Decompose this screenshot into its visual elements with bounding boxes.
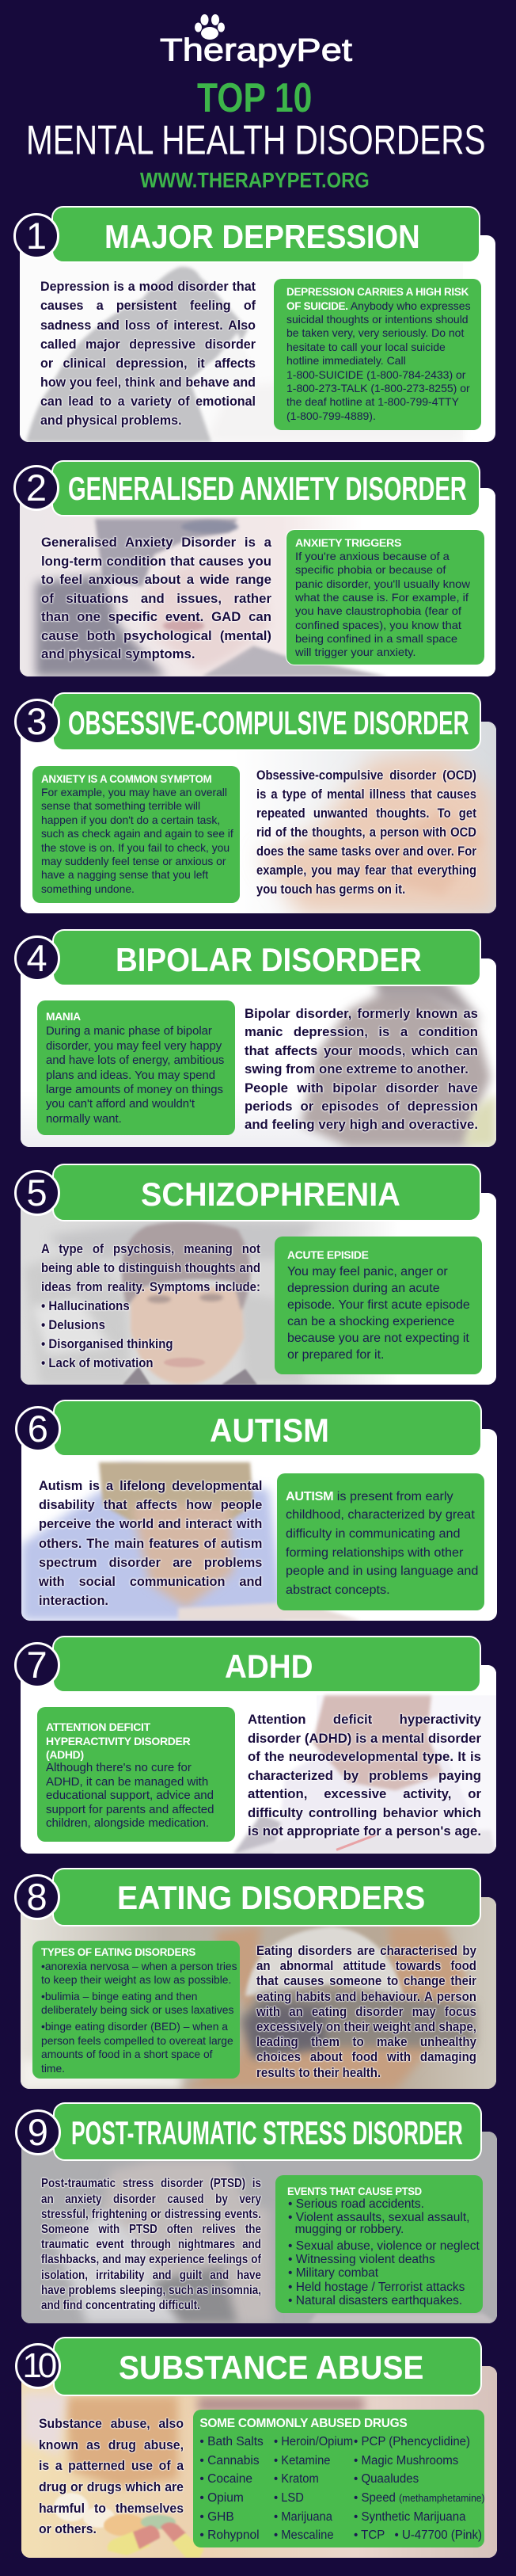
text block: definition: called major depressive disorder bbox=[40, 337, 256, 352]
section 3: obsessive-compulsive disorder bbox=[14, 692, 496, 913]
text block: definition: Depression is a mood disorder that bbox=[40, 279, 256, 294]
text block: definition: of the neurodevelopmental type. It is bbox=[248, 1749, 481, 1764]
number badge 8: 8 bbox=[27, 1876, 47, 1918]
callout text: For example, you may have an overall bbox=[41, 786, 227, 798]
callout text: be taken very, very seriously. Do not bbox=[286, 326, 464, 339]
drug list column 1: • Cocaine bbox=[199, 2472, 252, 2486]
number badge 4 bbox=[14, 936, 60, 981]
callout text: because you are not expecting it bbox=[287, 1332, 469, 1345]
text block: definition: Autism is a lifelong developmental bbox=[39, 1478, 262, 1493]
callout text: amounts of food in a short space of bbox=[41, 2048, 212, 2060]
callout text: hotline immediately. Call bbox=[286, 354, 406, 367]
text block: definition: sadness and loss of interest. Also bbox=[40, 318, 256, 333]
callout text: time. bbox=[41, 2062, 65, 2075]
text block: definition: with social communication and bbox=[39, 1574, 262, 1589]
callout text: ANXIETY TRIGGERS bbox=[295, 537, 401, 548]
callout: commonly abused drugs bbox=[193, 2410, 484, 2547]
number badge 6: 6 bbox=[28, 1408, 48, 1450]
number badge 2 bbox=[13, 465, 59, 511]
text block: definition: does the same tasks over and over. For bbox=[256, 844, 476, 859]
text block: definition: Substance abuse, also bbox=[39, 2416, 184, 2431]
callout text: During a manic phase of bipolar bbox=[46, 1025, 212, 1038]
drug list column 2: • LSD bbox=[274, 2491, 304, 2505]
text block: definition: results to their health. bbox=[256, 2064, 381, 2080]
text block: definition: and physical problems. bbox=[40, 413, 182, 428]
number badge 3: 3 bbox=[27, 700, 47, 742]
callout list: mugging or robbery. bbox=[295, 2223, 404, 2236]
callout text: Although there's no cure for bbox=[46, 1762, 192, 1774]
text block: definition bbox=[39, 2414, 184, 2540]
callout text: abstract concepts. bbox=[285, 1583, 389, 1597]
callout text: TYPES OF EATING DISORDERS bbox=[41, 1946, 195, 1958]
text block: definition: periods or episodes of depression bbox=[244, 1099, 477, 1114]
callout text: the stove is on. If you fail to check, you bbox=[41, 841, 230, 854]
logo: TherapyPet bbox=[160, 14, 353, 68]
section 10: substance abuse bbox=[0, 2337, 500, 2558]
header bar bbox=[52, 1400, 482, 1457]
callout text: being confined in a small space bbox=[295, 632, 457, 645]
panel: photo background bbox=[20, 235, 495, 442]
text block: definition: an anxiety disorder caused by very bbox=[41, 2193, 261, 2206]
drug list column 3: • Magic Mushrooms bbox=[354, 2454, 459, 2467]
text block: definition bbox=[38, 1478, 263, 1608]
text block: definition: of situations and issues, rather bbox=[41, 591, 271, 606]
text block: definition bbox=[244, 1006, 479, 1133]
text block: definition: attention, excessive activity, or bbox=[248, 1786, 481, 1801]
callout list: • Natural disasters earthquakes. bbox=[288, 2294, 462, 2307]
callout text: educational support, advice and bbox=[46, 1789, 214, 1802]
callout text: happen if you don't do a certain task, bbox=[41, 814, 220, 826]
callout: mania bbox=[37, 1000, 235, 1135]
text block: definition: perceive the world and interact with bbox=[39, 1516, 262, 1531]
callout: adhd management bbox=[37, 1707, 235, 1842]
text block: definition: interaction. bbox=[39, 1593, 108, 1608]
callout list: • Held hostage / Terrorist attacks bbox=[288, 2281, 465, 2294]
text block: definition: Eating disorders are characterised by bbox=[256, 1943, 476, 1958]
callout text bbox=[295, 537, 470, 658]
text block: definition: disability that affects how people bbox=[39, 1497, 262, 1512]
text block: definition and symptoms: • Disorganised thinking bbox=[41, 1336, 173, 1351]
callout text: MANIA bbox=[46, 1011, 81, 1023]
panel: photo background bbox=[21, 722, 496, 913]
drug list column 2: • Kratom bbox=[274, 2472, 319, 2486]
callout: events that cause ptsd bbox=[275, 2175, 483, 2313]
number badge 2: 2 bbox=[26, 467, 47, 509]
text block: definition and symptoms: • Delusions bbox=[41, 1317, 104, 1332]
text block: definition: and find concentrating difficult. bbox=[41, 2299, 200, 2312]
callout text: person feels compelled to overeat large bbox=[41, 2034, 233, 2047]
header bar bbox=[52, 929, 481, 986]
callout text: 1-800-273-TALK (1-800-273-8255) or bbox=[286, 382, 470, 394]
drug list column 2: • Ketamine bbox=[274, 2454, 330, 2467]
text block: definition: and feeling very high and overactive. bbox=[244, 1117, 477, 1132]
callout list: • Serious road accidents. bbox=[288, 2197, 424, 2211]
header bar bbox=[52, 1868, 481, 1926]
callout text: and have lots of energy, ambitious bbox=[46, 1054, 224, 1067]
section 6: autism bbox=[15, 1400, 497, 1621]
callout text: ANXIETY IS A COMMON SYMPTOM bbox=[41, 773, 211, 785]
callout text: have a nagging sense that you left bbox=[41, 868, 208, 881]
section 7: adhd bbox=[14, 1636, 496, 1854]
text block: definition: or others. bbox=[39, 2521, 97, 2536]
text block: definition: eating habits and behaviour. A person bbox=[256, 1989, 476, 2004]
header bar bbox=[52, 2102, 482, 2161]
section 5: schizophrenia bbox=[14, 1164, 496, 1385]
text block: definition: spectrum disorder are problems bbox=[39, 1555, 262, 1570]
section 8: eating disorders bbox=[14, 1868, 496, 2089]
text block: definition: excessively on their weight and shape, bbox=[256, 2019, 476, 2034]
icon: paw bbox=[195, 14, 225, 40]
callout text: ACUTE EPISIDE bbox=[287, 1249, 368, 1261]
callout text: episode. Your first acute episode bbox=[287, 1298, 469, 1312]
drug list column 1: • Cannabis bbox=[199, 2454, 260, 2467]
text block: definition and symptoms bbox=[40, 1241, 261, 1370]
text block: definition: Bipolar disorder, formerly known as bbox=[244, 1006, 477, 1021]
callout text: If you're anxious because of a bbox=[295, 550, 450, 562]
drug list column 2: • Mescaline bbox=[274, 2528, 334, 2542]
callout text: depression during an acute bbox=[287, 1282, 439, 1295]
callout text: panic disorder, you'll usually know bbox=[295, 577, 470, 590]
callout text: the deaf hotline at 1-800-799-4TTY bbox=[286, 395, 459, 408]
callout text: HYPERACTIVITY DISORDER bbox=[46, 1736, 190, 1747]
text block: definition: others. The main features of autism bbox=[39, 1536, 262, 1551]
text block: definition and symptoms: ideas from reality. Symptoms include: bbox=[41, 1279, 260, 1294]
callout text bbox=[287, 1249, 469, 1362]
callout: anxiety triggers bbox=[286, 530, 484, 665]
callout text: ADHD, it can be managed with bbox=[46, 1776, 208, 1789]
drug list column 1: • Rohypnol bbox=[199, 2528, 260, 2542]
text block: definition: can lead to a variety of emotional bbox=[40, 394, 256, 409]
text block: definition and symptoms: • Lack of motivation bbox=[41, 1355, 153, 1370]
callout: anxiety symptom bbox=[32, 765, 240, 903]
callout text: you have claustrophobia (fear of bbox=[295, 604, 461, 617]
callout text: you can't afford and wouldn't bbox=[46, 1098, 195, 1111]
callout list: • Witnessing violent deaths bbox=[288, 2253, 435, 2266]
text block: definition: Post-traumatic stress disorder (PTSD) is bbox=[41, 2177, 261, 2190]
callout: autism onset bbox=[277, 1473, 484, 1610]
text block: definition and symptoms: • Hallucinations bbox=[41, 1298, 129, 1313]
number badge 6 bbox=[15, 1406, 61, 1452]
section 9: post-traumatic stress disorder bbox=[15, 2102, 497, 2323]
text block: definition: to feel anxious about a wide range bbox=[41, 572, 271, 587]
callout text: something undone. bbox=[41, 882, 134, 895]
text block: definition and symptoms: being able to distinguish thoughts and bbox=[41, 1260, 260, 1275]
text block: definition: characterized by problems paying bbox=[248, 1768, 481, 1783]
number badge 3 bbox=[14, 699, 60, 745]
number badge 9: 9 bbox=[28, 2111, 48, 2153]
callout text: childhood, characterized by great bbox=[285, 1508, 474, 1522]
text block: definition: Someone with PTSD often relives the bbox=[41, 2223, 261, 2236]
drug list column 2 bbox=[274, 2433, 351, 2545]
callout text: large amounts of money on things bbox=[46, 1084, 223, 1096]
callout text: people and in using language and bbox=[285, 1564, 478, 1578]
number badge 5 bbox=[14, 1170, 60, 1216]
text block: definition: causes a persistent feeling of bbox=[40, 298, 256, 313]
drug list column 1: • GHB bbox=[199, 2510, 234, 2524]
text block: definition: drug or drugs which are bbox=[39, 2479, 184, 2494]
drug list column 3 bbox=[354, 2433, 482, 2545]
callout text: ATTENTION DEFICIT bbox=[46, 1721, 150, 1733]
callout heading: EVENTS THAT CAUSE PTSD bbox=[287, 2185, 422, 2197]
callout list: • Sexual abuse, violence or neglect bbox=[288, 2239, 480, 2253]
header bar bbox=[51, 206, 480, 263]
header bar bbox=[52, 2337, 482, 2396]
callout text: or prepared for it. bbox=[287, 1348, 384, 1362]
text block: definition: stressful, frightening or distressing events. bbox=[41, 2208, 261, 2221]
number badge 10: 10 bbox=[22, 2346, 53, 2385]
callout text: disorder, you may feel very happy bbox=[46, 1040, 222, 1053]
callout text: •anorexia nervosa – when a person tries bbox=[41, 1960, 237, 1972]
text block: definition: is a type of mental illness that causes bbox=[256, 787, 476, 802]
text block: definition: Obsessive-compulsive disorder (OCD) bbox=[256, 768, 476, 783]
section 1: major depression bbox=[13, 206, 495, 442]
callout text: sense that something terrible will bbox=[41, 799, 200, 812]
callout text: such as check again and again to see if bbox=[41, 827, 233, 840]
text block: definition: is not appropriate for a person's age. bbox=[248, 1823, 481, 1839]
drug list column 2: • Heroin/Opium bbox=[274, 2435, 353, 2448]
drug list column 3: • Speed (methamphetamine) bbox=[354, 2491, 485, 2505]
callout text: suicidal thoughts or intentions should bbox=[286, 313, 469, 326]
callout text bbox=[46, 1721, 214, 1830]
header bar bbox=[51, 459, 480, 516]
callout heading: SOME COMMONLY ABUSED DRUGS bbox=[199, 2417, 407, 2430]
callout text: to keep their weight as low as possible. bbox=[41, 1973, 231, 1986]
callout list: • Violent assaults, sexual assault, bbox=[288, 2211, 469, 2224]
callout text: support for parents and affected bbox=[46, 1804, 214, 1816]
number badge 5: 5 bbox=[27, 1172, 47, 1214]
callout text bbox=[286, 286, 471, 422]
callout text: forming relationships with other bbox=[285, 1546, 463, 1560]
callout text: can be a shocking experience bbox=[287, 1315, 454, 1328]
drug list column 2: • Marijuana bbox=[274, 2510, 332, 2524]
header bar bbox=[52, 1636, 481, 1693]
text block: definition: long-term condition that causes you bbox=[41, 554, 271, 569]
text block: definition: difficulty controlling behavior which bbox=[248, 1805, 481, 1820]
drug list column 3: • PCP (Phencyclidine) bbox=[354, 2435, 470, 2448]
text block: definition: isolation, irritability and guilt and have bbox=[41, 2269, 261, 2282]
text block: definition: swing from one extreme to another. bbox=[244, 1061, 468, 1077]
callout text: plans and ideas. You may spend bbox=[46, 1069, 215, 1082]
text block: definition: and physical symptoms. bbox=[41, 646, 195, 661]
text block: definition bbox=[40, 279, 256, 429]
panel: photo background bbox=[21, 2132, 497, 2323]
text block: definition: harmful to themselves bbox=[39, 2501, 184, 2516]
text block: definition: is a patterned use of a bbox=[39, 2458, 184, 2473]
header bar bbox=[52, 1164, 481, 1221]
text block: definition: disorder (ADHD) is a mental disorder bbox=[248, 1731, 481, 1746]
callout text: AUTISM is present from early bbox=[285, 1490, 453, 1503]
text block: definition bbox=[40, 2177, 263, 2313]
text block: definition: flashbacks, and may experience feelings of bbox=[41, 2253, 261, 2266]
text block: definition: Generalised Anxiety Disorder is a bbox=[41, 535, 271, 550]
section 4: bipolar disorder bbox=[14, 929, 496, 1147]
text block: definition: known as drug abuse, bbox=[39, 2437, 184, 2452]
text block: definition: with an eating disorder may focus bbox=[256, 2004, 476, 2019]
callout text: •binge eating disorder (BED) – when a bbox=[41, 2020, 228, 2033]
text block: definition: choices about food with damaging bbox=[256, 2049, 476, 2064]
section 2: generalised anxiety disorder bbox=[13, 460, 495, 676]
callout list bbox=[0, 2197, 500, 2308]
callout text: DEPRESSION CARRIES A HIGH RISK bbox=[286, 286, 469, 298]
text block: definition: leading them to make unhealthy bbox=[256, 2034, 476, 2049]
callout text: deliberately being sick or uses laxatives bbox=[41, 2003, 233, 2016]
logo: TherapyPet: TherapyPet bbox=[160, 32, 352, 68]
panel: photo background bbox=[21, 1193, 496, 1385]
panel: photo background bbox=[21, 2366, 497, 2558]
number badge 10 bbox=[15, 2343, 61, 2389]
text block: definition bbox=[40, 535, 272, 662]
number badge 7: 7 bbox=[27, 1644, 47, 1686]
text block: definition: how you feel, think and behave and bbox=[40, 375, 256, 390]
drug list column 3: • Quaaludes bbox=[354, 2472, 419, 2486]
text block: definition bbox=[247, 1712, 481, 1839]
header bar bbox=[52, 692, 481, 751]
callout text: OF SUICIDE. Anybody who expresses bbox=[286, 299, 471, 312]
panel: photo background bbox=[21, 1429, 497, 1621]
text block: definition and symptoms: A type of psychosis, meaning not bbox=[41, 1241, 260, 1256]
callout text: •bulimia – binge eating and then bbox=[41, 1990, 197, 2002]
text block: definition: People with bipolar disorder have bbox=[244, 1080, 477, 1096]
callout text: may suddenly feel tense or anxious or bbox=[41, 855, 226, 867]
callout text bbox=[41, 773, 233, 895]
number badge 1: 1 bbox=[26, 215, 47, 257]
drug list column 1 bbox=[199, 2433, 271, 2545]
callout: types of eating disorders bbox=[32, 1941, 240, 2079]
text block: definition: repeated unwanted thoughts. To get bbox=[256, 806, 476, 821]
callout text: normally want. bbox=[46, 1113, 122, 1126]
text block: definition: that causes someone to change their bbox=[256, 1973, 476, 1988]
panel: photo background bbox=[21, 958, 496, 1147]
text block: definition: than one specific event. GAD can bbox=[41, 609, 271, 624]
callout text bbox=[285, 1490, 478, 1597]
text block: definition: an abnormal attitude towards food bbox=[256, 1958, 476, 1973]
callout text: hesitate to call your local suicide bbox=[286, 341, 446, 353]
callout text: specific phobia or because of bbox=[295, 563, 446, 576]
callout text: (1-800-799-4889). bbox=[286, 410, 376, 422]
callout text bbox=[46, 1011, 224, 1126]
text block: definition bbox=[256, 768, 478, 897]
text block: definition: rid of the thoughts, a person with OCD bbox=[256, 825, 476, 840]
text block: definition: Attention deficit hyperactivity bbox=[248, 1712, 481, 1727]
panel: photo background bbox=[21, 1665, 496, 1854]
text block: definition: manic depression, is a condition bbox=[244, 1024, 477, 1039]
drug list column 3: • Synthetic Marijuana bbox=[354, 2510, 466, 2524]
panel: photo background bbox=[20, 488, 495, 676]
number badge 8 bbox=[14, 1874, 60, 1920]
panel: photo background bbox=[21, 1897, 496, 2089]
text block: definition: or clinical depression, it affects bbox=[40, 356, 256, 371]
callout text: You may feel panic, anger or bbox=[287, 1265, 447, 1278]
callout text bbox=[41, 1946, 237, 2075]
text block: definition: example, you may fear that everything bbox=[256, 863, 476, 878]
callout text: 1-800-SUICIDE (1-800-784-2433) or bbox=[286, 368, 465, 381]
callout text: what the cause is. For example, if bbox=[295, 591, 469, 604]
number badge 4: 4 bbox=[27, 937, 47, 979]
number badge 9 bbox=[15, 2109, 61, 2155]
text block: definition: cause both psychological (mental) bbox=[41, 628, 271, 643]
callout: suicide risk bbox=[274, 279, 481, 430]
text block: definition: have problems sleeping, such as insomnia, bbox=[41, 2284, 261, 2297]
text block: definition: you touch has germs on it. bbox=[256, 882, 405, 897]
text block: definition: traumatic event through nightmares and bbox=[41, 2238, 261, 2251]
drug list column 3: • TCP • U-47700 (Pink) bbox=[354, 2528, 482, 2542]
callout text: (ADHD) bbox=[46, 1749, 84, 1761]
drug list column 1: • Opium bbox=[199, 2491, 244, 2505]
callout text: children, alongside medication. bbox=[46, 1817, 209, 1830]
callout text: difficulty in communicating and bbox=[285, 1527, 460, 1541]
callout text: confined spaces), you know that bbox=[295, 619, 461, 631]
callout text: will trigger your anxiety. bbox=[295, 646, 416, 658]
number badge 1 bbox=[13, 213, 59, 259]
drug list column 1: • Bath Salts bbox=[199, 2435, 264, 2448]
number badge 7 bbox=[14, 1642, 60, 1688]
callout list: • Military combat bbox=[288, 2266, 378, 2280]
text block: definition bbox=[255, 1943, 478, 2080]
text block: definition: that affects your moods, which can bbox=[244, 1043, 477, 1058]
callout: acute episode bbox=[275, 1237, 482, 1374]
